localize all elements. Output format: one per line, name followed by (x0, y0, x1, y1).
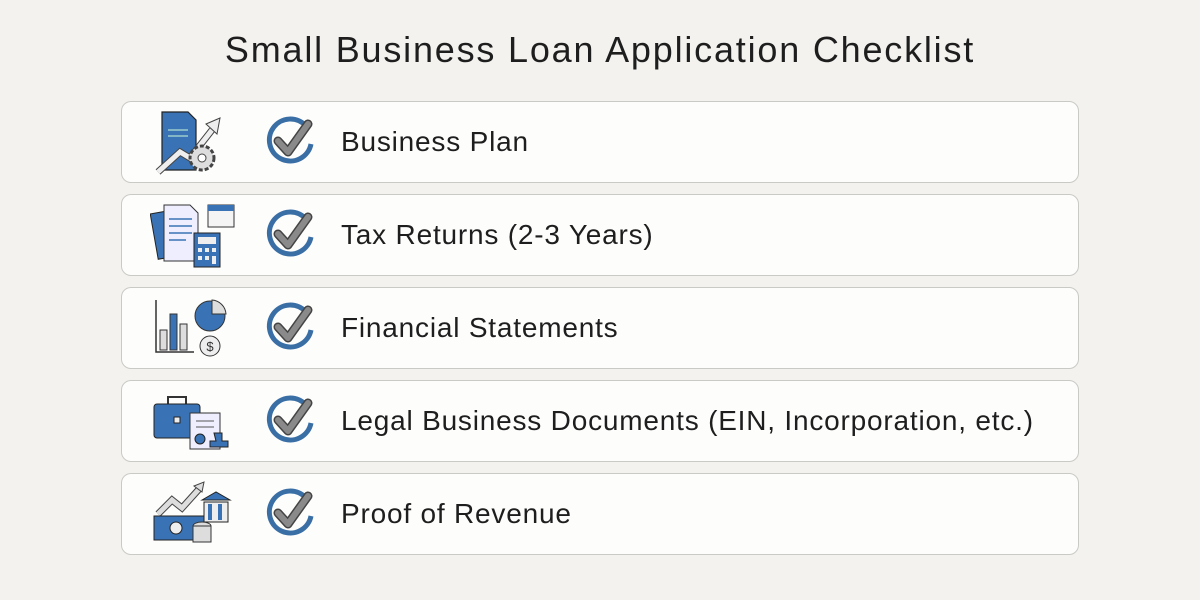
label: Tax Returns (2-3 Years) (341, 219, 654, 250)
icon: charts: $ (206, 339, 214, 354)
row: business plan (121, 101, 1079, 183)
label: Proof of Revenue (341, 498, 572, 529)
icon: tax documents (150, 204, 234, 268)
label: Legal Business Documents (EIN, Incorporation, etc.) (341, 405, 1034, 436)
row: financial statements (121, 287, 1079, 369)
checkmark (266, 488, 314, 536)
label: Financial Statements (341, 312, 618, 343)
checkmark (266, 116, 314, 164)
row: tax returns (121, 194, 1079, 276)
row: legal documents (121, 380, 1079, 462)
label: Business Plan (341, 126, 529, 157)
icon: briefcase and certificate (154, 396, 228, 450)
title: Small Business Loan Application Checklist (225, 29, 975, 70)
checkmark (266, 302, 314, 350)
icon: business plan (156, 111, 221, 175)
icon: charts (155, 300, 226, 356)
checkmark (266, 396, 314, 442)
icon: money and bank (154, 481, 232, 542)
checkmark (266, 210, 314, 256)
row: proof of revenue (121, 473, 1079, 555)
